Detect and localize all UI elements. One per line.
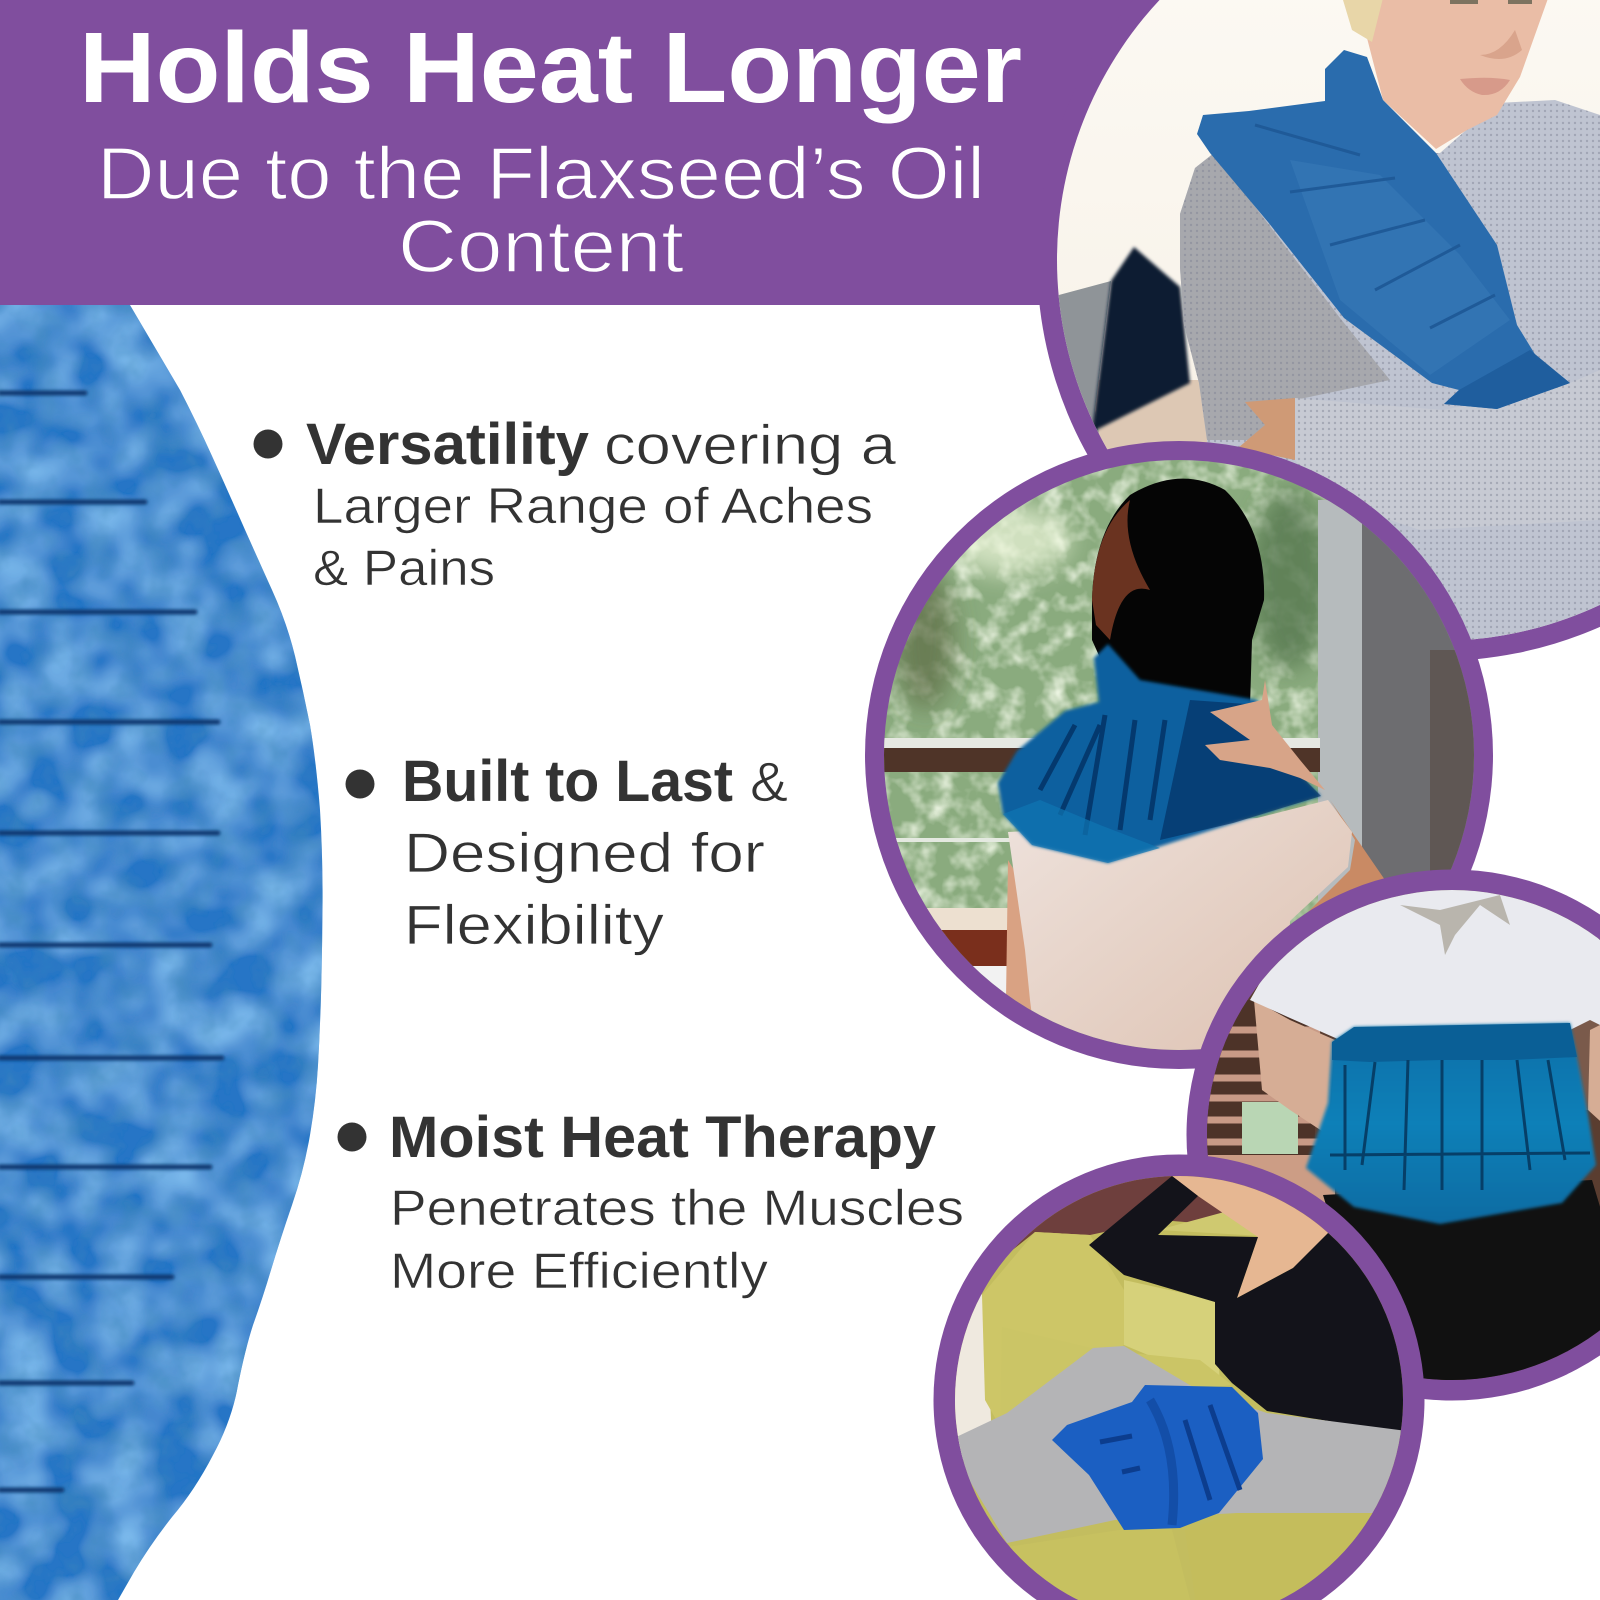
blue wrap: [1197, 50, 1570, 409]
product close-up: blue heat wrap: [0, 300, 323, 1600]
t-shirt: [1250, 880, 1600, 1040]
grey trousers: [950, 1346, 1415, 1543]
subtitle: [97, 132, 985, 288]
bullet: built to last: [346, 749, 788, 956]
face and neck: [1340, 0, 1551, 149]
black top: [1089, 1176, 1420, 1436]
bullet: moist heat therapy: Moist Heat Therapy: [389, 1105, 936, 1170]
subtitle: Content: [398, 205, 684, 288]
arms: [1254, 1000, 1600, 1135]
bullet: versatility: covering a: [604, 413, 897, 476]
back arm: [1006, 860, 1032, 1010]
hair: [1092, 479, 1264, 707]
bullet: built to last: Designed for: [404, 821, 765, 884]
wall: [1012, 1176, 1329, 1250]
hand: [1238, 398, 1295, 460]
window frame: [1318, 500, 1474, 902]
window shutters: [1205, 1000, 1600, 1205]
bullet: built to last: &: [750, 750, 788, 813]
title: Holds Heat Longer: [79, 12, 1022, 124]
woman skin: [1172, 1176, 1334, 1298]
header band: [0, 0, 1170, 305]
bullet: versatility: Versatility: [306, 412, 589, 477]
bullet: built to last: Built to Last: [402, 749, 733, 814]
yellow sofa cushions: [982, 1205, 1375, 1600]
photo circle: wrap on neck, back view: [865, 441, 1493, 1080]
background sofa and pillow: [1058, 245, 1207, 450]
subtitle: Due to the Flaxseed’s Oil: [97, 132, 985, 215]
bullet: versatility: Larger Range of Aches: [313, 478, 873, 534]
foliage: [880, 455, 1330, 935]
bullet: moist heat therapy: [338, 1105, 964, 1299]
bullet: moist heat therapy: Penetrates the Muscles: [390, 1180, 964, 1236]
neck wrap: [998, 644, 1321, 863]
waist wrap: [1306, 1023, 1596, 1224]
right arm: [1308, 801, 1384, 912]
photo circle: wrap on knee on a sofa: [934, 1154, 1424, 1600]
photo circle: wrap on lower back: [1186, 870, 1600, 1420]
photo circle: wrap on shoulders, front view: [1037, 0, 1600, 661]
bullet: versatility: [254, 412, 897, 596]
black leggings: [1323, 1180, 1600, 1380]
bullet: built to last: Flexibility: [404, 893, 664, 956]
t-shirt: [1008, 800, 1352, 1050]
white cushion: [955, 1294, 992, 1460]
sweater: [1180, 100, 1600, 660]
hand on shoulder: [1205, 680, 1325, 790]
balcony rail: [884, 738, 1320, 994]
bullet: moist heat therapy: More Efficiently: [390, 1243, 768, 1299]
bullet: versatility: & Pains: [313, 540, 495, 596]
knee wrap: [1052, 1385, 1263, 1530]
